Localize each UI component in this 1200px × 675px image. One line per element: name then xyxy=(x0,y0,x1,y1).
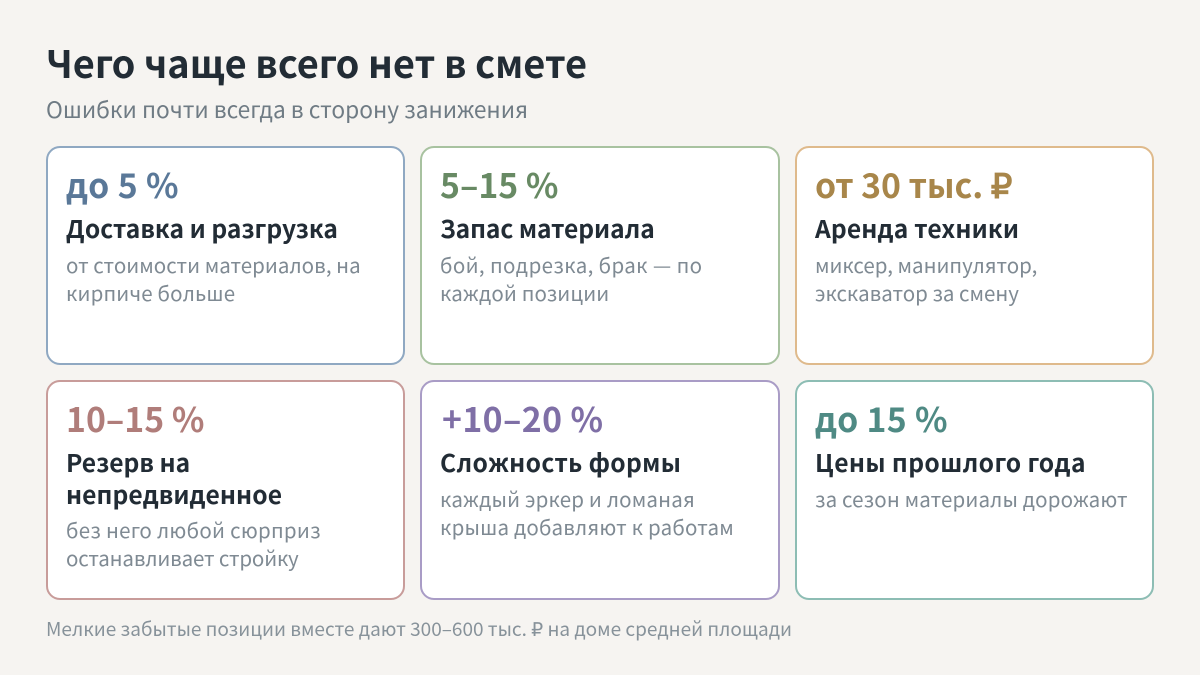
description: крыша добавляют к работам xyxy=(440,511,734,541)
footnote: Мелкие забытые позиции вместе дают 300–600 тыс. ₽ на доме средней площади xyxy=(46,615,792,642)
description: без него любой сюрприз xyxy=(66,514,321,544)
heading: Аренда техники xyxy=(815,210,1019,246)
heading: Доставка и разгрузка xyxy=(66,210,338,246)
value: 5–15 % xyxy=(440,159,558,208)
description: экскаватор за смену xyxy=(815,277,1019,307)
heading: Запас материала xyxy=(440,210,655,246)
heading: Цены прошлого года xyxy=(815,444,1086,480)
description: бой, подрезка, брак — по xyxy=(440,249,702,279)
description: от стоимости материалов, на xyxy=(66,249,361,279)
description: миксер, манипулятор, xyxy=(815,249,1037,279)
description: за сезон материалы дорожают xyxy=(815,483,1128,513)
description: кирпиче больше xyxy=(66,277,235,307)
title: Чего чаще всего нет в смете xyxy=(46,34,587,89)
heading xyxy=(66,444,282,512)
value: до 15 % xyxy=(815,393,948,442)
panel: material reserve xyxy=(420,146,780,365)
description xyxy=(66,514,321,572)
description: каждой позиции xyxy=(440,277,609,307)
value: от 30 тыс. ₽ xyxy=(815,159,1012,208)
panel: contingency xyxy=(46,380,405,600)
description xyxy=(815,249,1037,307)
value: +10–20 % xyxy=(442,393,604,442)
panel: last year's prices xyxy=(795,380,1154,600)
description xyxy=(440,483,734,541)
description xyxy=(66,249,361,307)
value: до 5 % xyxy=(66,159,179,208)
heading: Резерв на xyxy=(66,444,190,480)
panel: delivery xyxy=(46,146,405,365)
heading: Сложность формы xyxy=(440,444,681,480)
subtitle: Ошибки почти всегда в сторону занижения xyxy=(46,92,528,125)
panel: shape complexity xyxy=(420,380,780,600)
description: останавливает стройку xyxy=(66,542,298,572)
value: 10–15 % xyxy=(66,393,204,442)
heading: непредвиденное xyxy=(66,476,282,512)
description xyxy=(440,249,702,307)
panel: equipment rental xyxy=(795,146,1154,365)
description: каждый эркер и ломаная xyxy=(440,483,695,513)
